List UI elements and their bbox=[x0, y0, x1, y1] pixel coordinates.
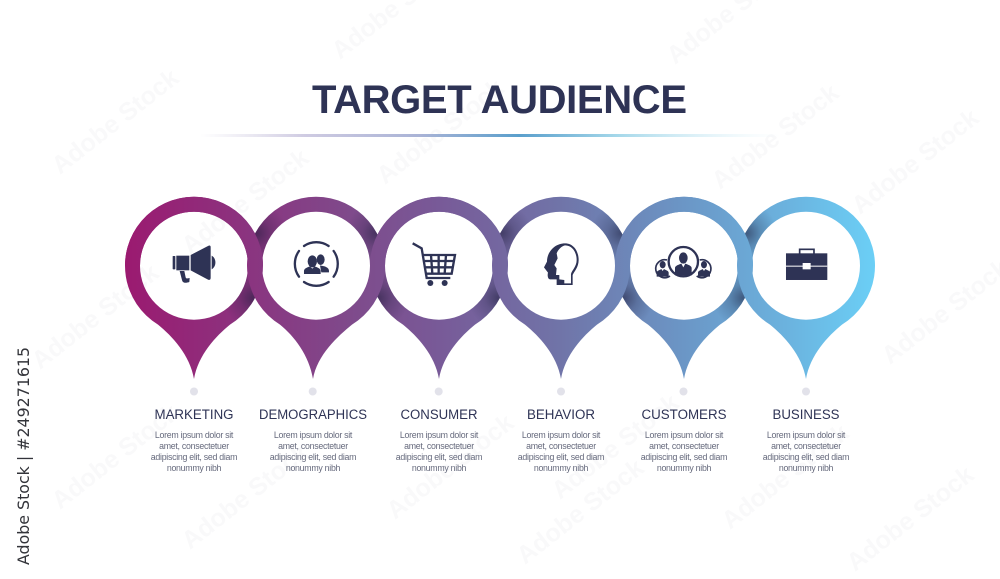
text: consumer: amet, consectetuer bbox=[404, 441, 474, 451]
text: customers: nonummy nibh bbox=[657, 463, 712, 473]
text: consumer: adipiscing elit, sed diam bbox=[396, 452, 482, 462]
text: business: adipiscing elit, sed diam bbox=[763, 452, 849, 462]
title divider bbox=[200, 134, 780, 137]
watermark pattern: Adobe Stock bbox=[706, 79, 844, 195]
interlaced upper ring overlaps bbox=[125, 196, 753, 265]
pin: customers bbox=[622, 196, 753, 379]
text: customers: amet, consectetuer bbox=[649, 441, 719, 451]
watermark pattern: Adobe Stock bbox=[176, 144, 314, 260]
text: marketing: adipiscing elit, sed diam bbox=[151, 452, 237, 462]
watermark pattern: Adobe Stock bbox=[716, 419, 854, 535]
watermark pattern: Adobe Stock bbox=[176, 439, 314, 555]
watermark pattern: Adobe Stock bbox=[511, 454, 649, 570]
text: customers bbox=[641, 407, 727, 473]
watermark pattern: Adobe Stock bbox=[371, 74, 509, 190]
text: consumer: Lorem ipsum dolor sit bbox=[400, 430, 479, 440]
text: consumer bbox=[396, 407, 482, 473]
text: business bbox=[763, 407, 849, 473]
pin: demographics bbox=[247, 196, 384, 379]
pin: consumer bbox=[378, 196, 508, 379]
text: business: nonummy nibh bbox=[779, 463, 834, 473]
pin: behavior bbox=[492, 196, 630, 379]
icon: customers group bbox=[656, 247, 711, 278]
stock id side text: Adobe Stock | #249271615 bbox=[14, 347, 33, 565]
text: demographics: adipiscing elit, sed diam bbox=[270, 452, 356, 462]
text: demographics: amet, consectetuer bbox=[278, 441, 348, 451]
text: behavior: nonummy nibh bbox=[534, 463, 589, 473]
text: behavior: amet, consectetuer bbox=[526, 441, 596, 451]
watermark pattern: Adobe Stock bbox=[26, 259, 164, 375]
pin: marketing bbox=[125, 196, 263, 379]
watermark pattern: Adobe Stock bbox=[46, 399, 184, 515]
icon: human head profile bbox=[544, 243, 579, 285]
marker dots bbox=[190, 388, 810, 396]
watermark pattern: Adobe Stock bbox=[46, 64, 184, 180]
text: demographics: DEMOGRAPHICS bbox=[259, 407, 367, 422]
text: demographics bbox=[259, 407, 367, 473]
text: business: amet, consectetuer bbox=[771, 441, 841, 451]
text: consumer: CONSUMER bbox=[400, 407, 478, 422]
text: customers: adipiscing elit, sed diam bbox=[641, 452, 727, 462]
icon: megaphone bbox=[173, 246, 215, 283]
pin: business bbox=[737, 196, 875, 379]
icon: briefcase bbox=[786, 249, 827, 280]
text: behavior: BEHAVIOR bbox=[527, 407, 595, 422]
text: customers: CUSTOMERS bbox=[642, 407, 727, 422]
text: customers: Lorem ipsum dolor sit bbox=[645, 430, 724, 440]
watermark pattern: Adobe Stock bbox=[381, 409, 519, 525]
text: marketing: nonummy nibh bbox=[167, 463, 222, 473]
text: business: BUSINESS bbox=[772, 407, 840, 422]
title: TARGET AUDIENCE bbox=[312, 78, 687, 122]
watermark pattern: Adobe Stock bbox=[546, 389, 684, 505]
text: marketing: MARKETING bbox=[154, 407, 234, 422]
text: business: Lorem ipsum dolor sit bbox=[767, 430, 846, 440]
text: consumer: nonummy nibh bbox=[412, 463, 467, 473]
text: demographics: nonummy nibh bbox=[286, 463, 341, 473]
icon: shopping cart bbox=[413, 243, 455, 286]
text: marketing bbox=[151, 407, 237, 473]
watermark pattern: Adobe Stock bbox=[841, 461, 979, 577]
text: marketing: amet, consectetuer bbox=[159, 441, 229, 451]
text: behavior bbox=[518, 407, 604, 473]
text: behavior: adipiscing elit, sed diam bbox=[518, 452, 604, 462]
text: behavior: Lorem ipsum dolor sit bbox=[522, 430, 601, 440]
watermark pattern: Adobe Stock bbox=[846, 104, 984, 220]
text: marketing: Lorem ipsum dolor sit bbox=[155, 430, 234, 440]
text: demographics: Lorem ipsum dolor sit bbox=[274, 430, 353, 440]
icon: demographics people bbox=[295, 242, 338, 286]
